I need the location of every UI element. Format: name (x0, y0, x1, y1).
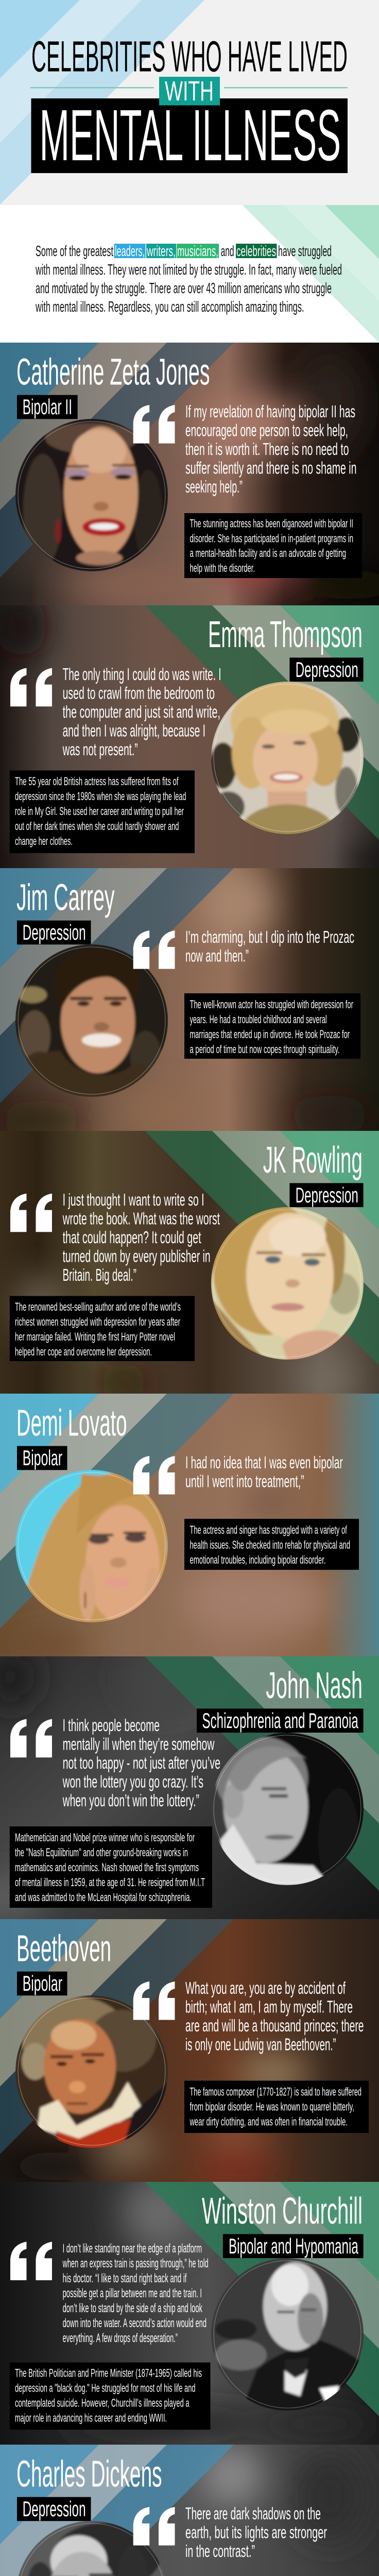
quote text: down into the water. A second’s action would end (63, 2316, 206, 2330)
tag: diagnosis: Bipolar (23, 1971, 62, 1995)
quote text (185, 402, 356, 497)
description box (10, 2363, 211, 2430)
panel: Charles Dickens (0, 2445, 379, 2576)
description box: out of her dark times when she could hardly shower and (15, 820, 179, 833)
tag: diagnosis: Bipolar (23, 1446, 62, 1470)
description box: of mental illness in 1959, at the age of 31. He resigned from M.I.T (15, 1876, 205, 1889)
quote text: don’t like to stand by the side of a ship and look (63, 2301, 203, 2315)
quote text: won the lottery you go crazy. It’s (62, 1772, 203, 1792)
description box: help with the disorder. (190, 562, 255, 574)
description box: depression since the 1980s when she was playing the lead (15, 790, 186, 803)
description box: major role in advancing his career and ending WWII. (15, 2412, 167, 2425)
quote text: mentally ill when they’re somehow (63, 1735, 215, 1754)
icon: quote mark (10, 668, 52, 706)
name: Catherine Zeta Jones (16, 351, 210, 393)
icon: quote mark (10, 1719, 52, 1757)
icon: quote mark (10, 1194, 52, 1232)
tag: diagnosis: Bipolar II (23, 395, 72, 419)
description box (10, 1826, 212, 1908)
photo: Winston Churchill (210, 2257, 365, 2412)
panel: Emma Thompson (0, 595, 379, 873)
description box: her marraige failed. Writing the first Harry Potter novel (15, 1330, 175, 1343)
tag: diagnosis (17, 920, 91, 944)
intro text (35, 243, 342, 315)
photo: Emma Thompson (211, 682, 364, 834)
name: Demi Lovato (16, 1402, 127, 1444)
description box: helped her cope and overcome her depression. (15, 1345, 152, 1358)
intro text: musicians, (177, 243, 218, 260)
icon: quote mark (133, 1981, 175, 2020)
header panel (0, 0, 379, 205)
photo: Charles Dickens (14, 2520, 169, 2576)
intro text: Some of the greatest (36, 243, 113, 260)
photo: Demi Lovato (14, 1469, 169, 1623)
description box (10, 770, 195, 853)
description box: The British Politician and Prime Minister (1874-1965) called his (15, 2367, 202, 2380)
panel: Jim Carrey (0, 868, 379, 1131)
quote text: that could happen? It could get (63, 1228, 201, 1247)
description box (184, 513, 362, 578)
intro text: and (221, 243, 234, 260)
quote text (185, 928, 354, 965)
panel: JK Rowling (0, 1131, 379, 1394)
quote text: used to crawl from the bedroom to (63, 684, 215, 703)
photo: Beethoven (14, 1994, 169, 2149)
photo: Jim Carrey (14, 943, 169, 1098)
quote text (62, 1191, 220, 1285)
panel: Demi Lovato (0, 1394, 379, 1656)
intro panel (0, 205, 379, 343)
quote text: when an express train is passing through,” he told (62, 2257, 209, 2270)
quote text: wrote the book. What was the worst (62, 1210, 220, 1228)
description box: richest women struggled with depression for years after (15, 1315, 180, 1328)
intro text: leaders, (115, 243, 145, 260)
quote text: was not present.” (62, 740, 138, 759)
description box (184, 993, 360, 1059)
quote text: when you don’t win the lottery.” (62, 1791, 199, 1810)
panel: Catherine Zeta Jones (0, 343, 379, 605)
quote text: and then I was alright, because I (63, 721, 205, 741)
name: Charles Dickens (16, 2453, 162, 2495)
description box: the "Nash Equilibrium" and other ground-breaking works in (15, 1846, 188, 1859)
quote text: now and then.” (185, 947, 249, 965)
description box: change her clothes. (15, 835, 73, 848)
description box (184, 2081, 369, 2133)
quote text (185, 1979, 364, 2055)
description box: role in My Girl. She used her career and writing to pull her (15, 805, 184, 818)
photo: Catherine Zeta Jones (14, 418, 169, 572)
icon: quote mark (133, 930, 175, 969)
title badge: with: WITH (165, 76, 214, 107)
tag: diagnosis: Depression (23, 920, 86, 944)
tag: diagnosis (17, 1971, 67, 1995)
quote text: his doctor. “I like to stand right back and if (63, 2272, 187, 2285)
icon: quote mark (133, 2507, 175, 2546)
name: Jim Carrey (16, 877, 115, 918)
quote text: not too happy - not just after you’ve (63, 1754, 220, 1773)
quote text: I think people become (63, 1716, 160, 1735)
description box: mathematics and econimics. Nash showed the first symptoms (15, 1861, 199, 1874)
icon: quote mark (133, 1456, 175, 1495)
quote text: everything. A few drops of desperation.” (63, 2331, 178, 2345)
description box: Mathemetician and Nobel prize winner who is responsible for (15, 1831, 195, 1844)
photo: John Nash (210, 1732, 365, 1891)
tag: diagnosis (17, 395, 78, 419)
quote text (62, 1716, 220, 1810)
icon: quote mark (10, 2242, 52, 2280)
description box: contemplated suicide. However, Churchill’s illness played a (15, 2397, 190, 2410)
quote text: Britain. Big deal.” (63, 1266, 136, 1285)
panel: John Nash (0, 1646, 379, 1919)
quote text: turned down by every publisher in (63, 1247, 211, 1266)
tag: diagnosis (17, 1446, 67, 1470)
description box: depression a "black dog." He struggled for most of his life and (15, 2382, 196, 2395)
description box (184, 1519, 359, 1570)
quote text (185, 2504, 327, 2561)
photo: JK Rowling (210, 1201, 365, 1361)
intro text: celebrities (236, 243, 276, 260)
quote text: I just thought I want to write so I (63, 1191, 204, 1210)
quote text: seeking help.” (185, 478, 243, 497)
tag: diagnosis (17, 2497, 91, 2521)
description box: The renowned best-selling author and one of the world’s (15, 1300, 181, 1313)
quote text (185, 1453, 343, 1491)
intro text: have struggled (278, 243, 332, 260)
tag: diagnosis: Depression (23, 2497, 86, 2521)
panel: Winston Churchill (0, 2177, 379, 2445)
quote text (62, 665, 221, 759)
quote text (62, 2242, 209, 2345)
description box (10, 1296, 195, 1361)
quote text: in the contrast.” (185, 2542, 255, 2561)
quote text: I don’t like standing near the edge of a platform (63, 2242, 202, 2256)
panel: Beethoven (0, 1919, 379, 2182)
description box: and was admitted to the McLean Hospital for schizophrenia. (15, 1891, 192, 1904)
quote text: the computer and just sit and write, (63, 703, 220, 722)
name: Beethoven (16, 1928, 111, 1969)
intro text: writers, (146, 243, 176, 260)
quote text: The only thing I could do was write. I (63, 665, 221, 684)
icon: quote mark (133, 405, 175, 444)
description box: The 55 year old British actress has suffered from fits of (15, 775, 179, 788)
quote text: possible get a pillar between me and the train. I (63, 2286, 202, 2300)
